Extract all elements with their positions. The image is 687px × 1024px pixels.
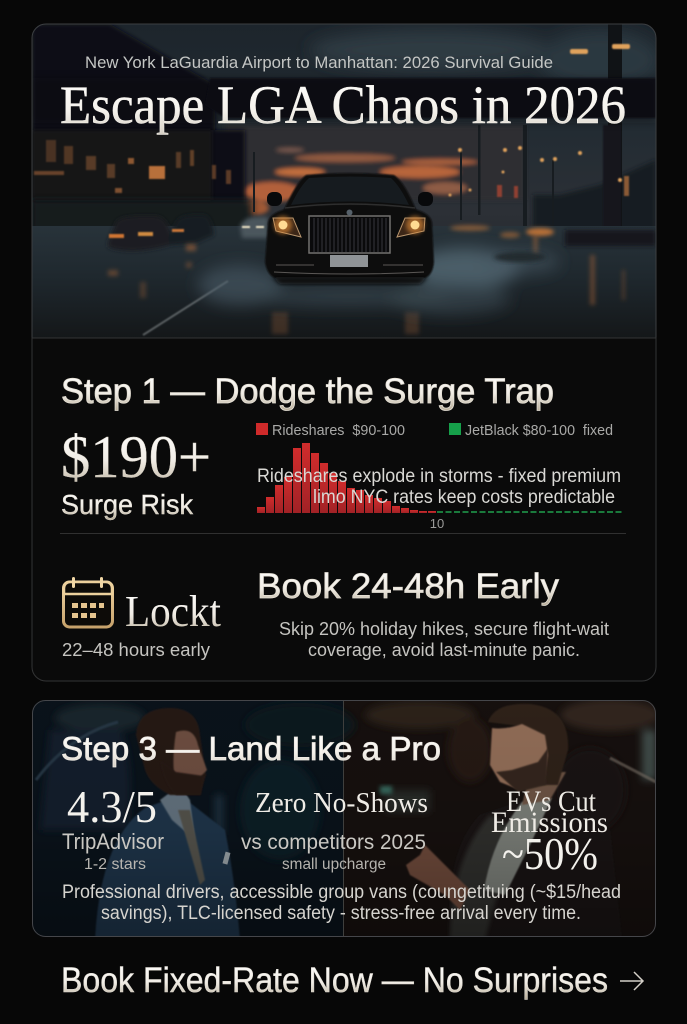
heading: step 1: Step 1 — Dodge the Surge Trap: [61, 372, 554, 411]
text block: booking advice: coverage, avoid last-minute panic.: [308, 639, 580, 660]
right skyline and lamp posts: [253, 24, 656, 226]
wing mirrors: [267, 192, 282, 206]
text block: driver benefits: savings), TLC-licensed safety - stress-free arrival every time.: [101, 903, 581, 924]
panel: hero photo of limousine on wet road: [32, 24, 660, 338]
chart caption: limo NYC rates keep costs predictable: [313, 487, 615, 508]
stat: zero no-shows: vs competitors 2025: [241, 830, 426, 854]
left buildings: [32, 24, 252, 240]
background cars left: [108, 215, 268, 251]
chart legend: Rideshares $90-100: [272, 423, 405, 439]
lower chrome trim: [274, 265, 424, 274]
car body: [265, 204, 434, 278]
limousine: [265, 173, 434, 284]
grille: [309, 210, 390, 253]
road line: [143, 281, 228, 335]
car roof and windshield: [283, 173, 417, 212]
stat: EV emissions: Emissions: [491, 806, 608, 839]
stat: TripAdvisor rating: 1-2 stars: [84, 856, 146, 873]
chart caption: [257, 466, 621, 508]
road spray: [198, 248, 560, 314]
icon: calendar: [64, 577, 112, 627]
stat: zero no-shows: [241, 787, 428, 873]
arrow: [620, 972, 643, 990]
stat: surge risk: $190+: [61, 424, 211, 490]
text block: driver benefits: Professional drivers, accessible group vans (coungetituing (~$15/head: [62, 882, 621, 903]
panel: hero border: [32, 24, 656, 338]
stat: lock in: [62, 587, 221, 660]
call to action: Book Fixed-Rate Now — No Surprises: [61, 961, 608, 1000]
sunset clouds: [225, 125, 525, 215]
right interior: [366, 701, 655, 814]
heading: book early: Book 24-48h Early: [257, 567, 560, 606]
text block: booking advice: [279, 618, 609, 660]
traffic lights right: [450, 225, 554, 238]
bar chart: rideshare surge vs fixed rate: 10: [430, 516, 444, 531]
heading: step 3: Step 3 — Land Like a Pro: [61, 730, 441, 767]
bar chart: rideshare surge vs fixed rate: [257, 443, 624, 531]
stat: TripAdvisor rating: TripAdvisor: [62, 829, 164, 854]
chart legend: [256, 423, 613, 439]
overpass band behind title: [205, 78, 656, 118]
wet road: [32, 226, 656, 253]
stat: lock in: 22–48 hours early: [62, 640, 210, 660]
subtitle: New York LaGuardia Airport to Manhattan: 2026 Survival Guide: [85, 53, 553, 72]
panel: step 1 and booking: [32, 338, 656, 681]
stat: EV emissions: EVs Cut: [506, 785, 597, 818]
headlights: [273, 216, 425, 237]
stat: EV emissions: ~50%: [502, 828, 598, 879]
stat: surge risk: Surge Risk: [61, 489, 194, 520]
stat: TripAdvisor rating: [62, 781, 164, 873]
licence plate: [330, 255, 368, 267]
stat: EV emissions: [491, 785, 608, 879]
chart caption: Rideshares explode in storms - fixed premium: [257, 466, 621, 487]
right guard rail: [565, 230, 656, 246]
stat: zero no-shows: small upcharge: [282, 856, 386, 873]
left man in navy suit: [95, 708, 240, 940]
road reflections: [108, 236, 625, 334]
text block: booking advice: Skip 20% holiday hikes, secure flight-wait: [279, 618, 609, 639]
panel: step 3 border: [32, 700, 656, 936]
panel: step 3 photo split: [32, 699, 660, 940]
stat: surge risk: [61, 424, 211, 520]
left interior: [40, 703, 355, 860]
right man in dark suit: [406, 704, 622, 940]
stat: lock in: Lockt: [125, 587, 221, 636]
chart legend: JetBlack $80-100 fixed: [465, 423, 613, 439]
stat: TripAdvisor rating: 4.3/5: [67, 781, 157, 832]
stat: zero no-shows: Zero No-Shows: [255, 787, 428, 819]
text block: driver benefits: [62, 882, 621, 924]
title: Escape LGA Chaos in 2026: [60, 75, 626, 135]
